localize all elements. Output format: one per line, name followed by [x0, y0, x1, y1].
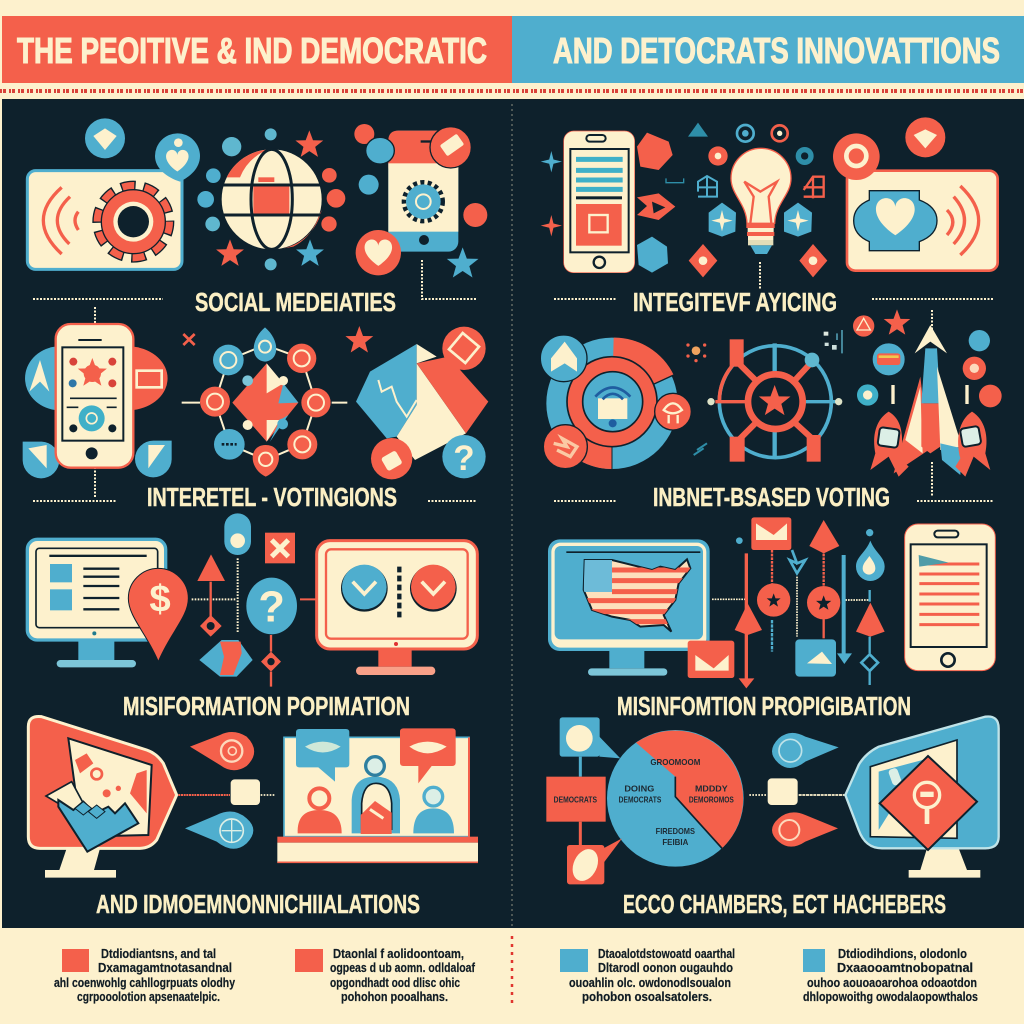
- pie label: DOING: [624, 784, 654, 794]
- chart: donut with wifi: [540, 335, 691, 469]
- legend item: blue two: ouhoo aouoaoarohoa odoaotdon: [807, 976, 977, 990]
- pie label: FEIBIA: [662, 837, 688, 847]
- icon: monitor with vote buttons: [317, 541, 477, 675]
- icon: star wheel: [707, 339, 842, 462]
- pie label: DEMOROMOS: [689, 795, 734, 805]
- pin symbol: $: [149, 578, 171, 621]
- icon: tilted monitor with bulb diamond: [845, 716, 999, 878]
- panel: top right icons: [540, 117, 1002, 477]
- legend item: red one: [54, 947, 235, 1004]
- heading: internet voting left: INTERETEL - VOTINGIONS: [147, 482, 397, 512]
- icon: red x: [183, 334, 195, 345]
- icon: connector hub with cones: [749, 733, 845, 847]
- section headings and connectors: [33, 260, 994, 919]
- icon: red star: [345, 326, 373, 353]
- pie label: FIREDOMS: [656, 826, 695, 836]
- panel: top left icons: [23, 118, 488, 479]
- box label: DEMOCRATS: [554, 795, 597, 805]
- legend item: blue one: Dltarodl oonon ougauhdo: [598, 961, 733, 975]
- legend item: red two: Dtaonlal f aolidoontoam,: [333, 947, 464, 961]
- legend item: red two: pohohon pooalhans.: [341, 990, 448, 1004]
- icon: network diagram: [182, 327, 347, 477]
- legend item: blue one: ouoahlin olc. owdonodlsoualon: [569, 976, 731, 990]
- icon: phone side shapes: [541, 133, 675, 273]
- legend item: blue one: pohobon osoalsatolers.: [582, 990, 712, 1004]
- legend item: blue two: Dtdiodihdions, olodonlo: [838, 947, 967, 961]
- legend item: red one: Dxamagamtnotasandnal: [98, 961, 232, 975]
- icon: surrounding idea symbols: [666, 123, 827, 277]
- question glyph: ?: [258, 584, 285, 632]
- pie label: DEMOCRATS: [619, 795, 662, 805]
- icon: connector hub with cones: [178, 732, 275, 849]
- chart: pie with labels: [607, 730, 744, 867]
- heading: misinformation left: MISIFORMATION POPIMATION: [123, 691, 410, 721]
- icon: blue heart badge: [155, 133, 200, 182]
- icon: broadcast card with gear: [27, 171, 182, 269]
- icon: monitor with document: [27, 539, 166, 667]
- legend item: red two: opgondhadt ood dlisc ohic: [330, 976, 460, 990]
- header: right blue band: [512, 16, 1024, 83]
- heading: communications: AND IDMOEMNONNICHIIALATIONS: [96, 889, 420, 919]
- legend item: red one: Dtdiodiantsns, and tal: [101, 947, 216, 961]
- legend item: red one: ahl coenwohlg cahllogrpuats olodhy: [54, 976, 235, 990]
- heading: social media: SOCIAL MEDEIATIES: [195, 287, 396, 317]
- heading: misinformation right: MISINFOMTION PROPIGIBATION: [617, 691, 911, 721]
- panel: lower left icons: [27, 513, 478, 878]
- legend item: blue one: [560, 947, 735, 1004]
- legend item: red one: cgrpooolotion apsenaatelpic.: [77, 990, 220, 1004]
- icon: monitor with US flag map: [548, 539, 710, 676]
- icon: phone with gear: [388, 131, 458, 252]
- icon: satellite dots and stars: [197, 128, 345, 270]
- icon: red envelope: [688, 641, 734, 678]
- header: left red band: [2, 16, 512, 83]
- pie label: GROOMOOM: [650, 757, 700, 767]
- icon: heart circle: [356, 230, 401, 275]
- icon: blue badge: [85, 118, 125, 158]
- icon: chart callouts: [546, 717, 622, 885]
- legend item: blue one: Dtaoalotdstowoatd oaarthal: [598, 947, 735, 961]
- title left: THE PEOITIVE & IND DEMOCRATIC: [17, 30, 487, 71]
- icon: phone with text bars: [564, 131, 635, 273]
- icon: misinformation flow diagram: [192, 513, 316, 687]
- legend item: red two: [295, 947, 476, 1004]
- legend item: red two: ogpeas d ub aomn. odldaloaf: [330, 961, 476, 975]
- icon: dollar pin: [128, 568, 188, 662]
- legend item: blue two: [803, 947, 978, 1004]
- heading: internet voting right: INBNET-BSASED VOTING: [653, 482, 890, 512]
- icon: map puzzle: [356, 327, 488, 479]
- legend item: blue two: dhlopowoithg owodalaopowthalos: [803, 990, 978, 1004]
- bottom divider: [511, 936, 513, 1006]
- icon: phone with app grid: [23, 324, 172, 478]
- icon: lightbulb: [731, 148, 791, 254]
- panel: lower right icons: [546, 517, 999, 885]
- question mark: ?: [453, 439, 475, 478]
- icon: phone with red text lines: [905, 524, 995, 671]
- icon: rockets: [853, 309, 1002, 477]
- pie label: MDDDY: [695, 784, 728, 794]
- heading: interactive: INTEGITEVF AYICING: [633, 287, 837, 317]
- legend item: blue two: Dxaaooamtnobopatnal: [837, 961, 973, 975]
- icon: propagation flow diagram: [712, 517, 885, 688]
- icon: broadcast card with heart: [833, 117, 998, 271]
- icon: globe: [222, 149, 322, 249]
- icon: small dot clusters: [686, 330, 842, 455]
- icon: townhall meeting scene: [277, 728, 478, 863]
- icon: orbit circles around phone: [354, 124, 487, 277]
- icon: tilted monitor with map: [28, 716, 177, 878]
